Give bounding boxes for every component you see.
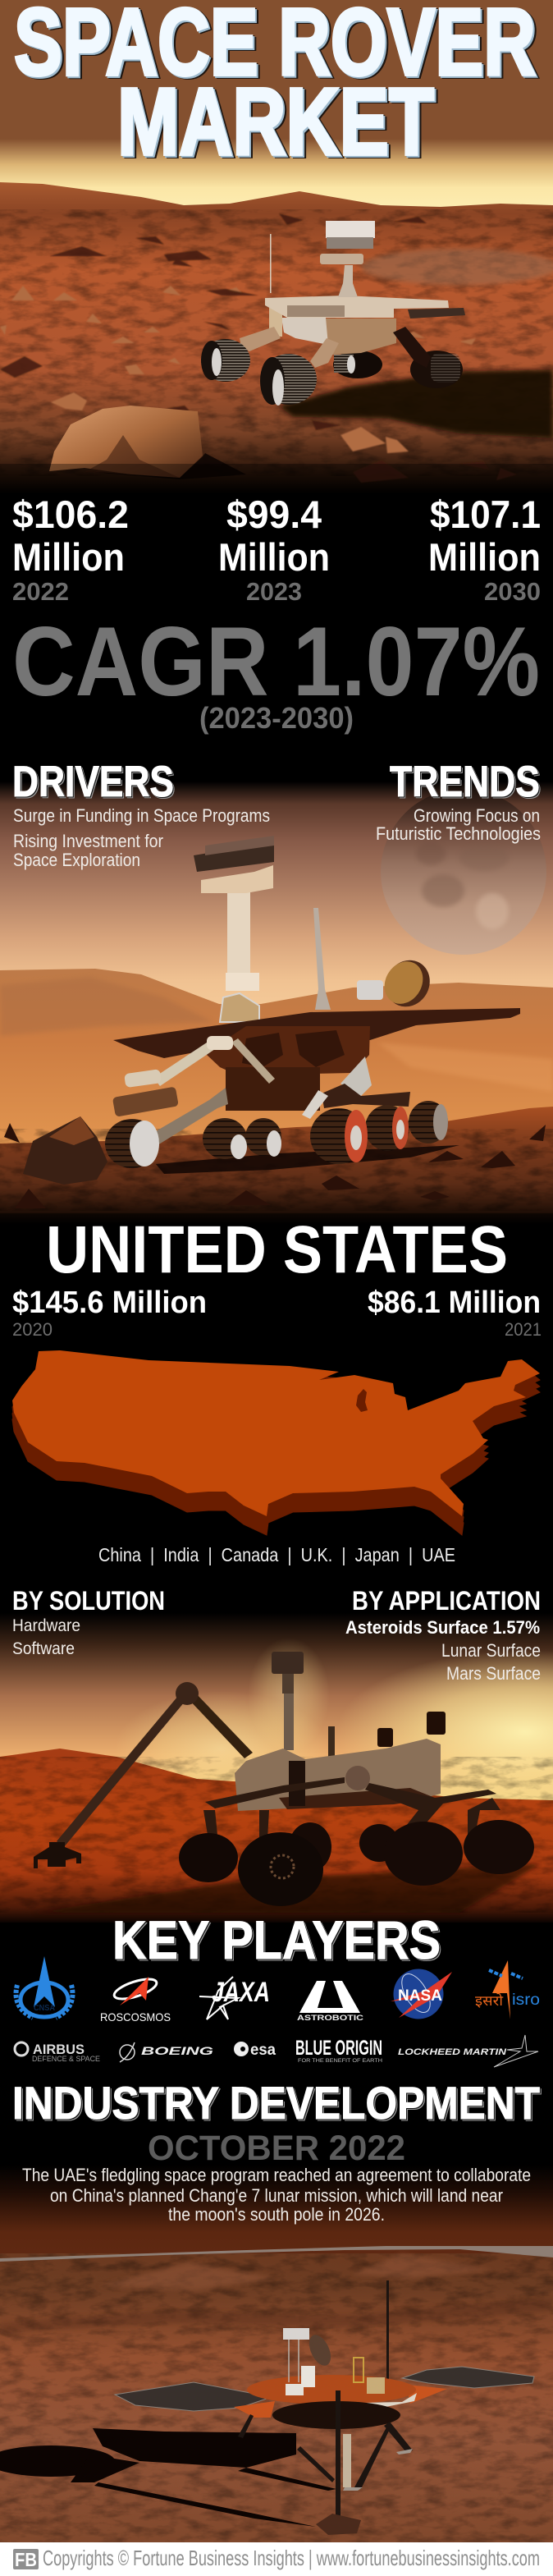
value 2021: $86.1 Million	[368, 1286, 541, 1320]
camera bar	[194, 836, 274, 872]
footer background	[0, 2542, 553, 2576]
deck rim	[322, 2393, 417, 2407]
suspension right	[393, 327, 431, 368]
bright sand patch	[361, 249, 553, 285]
solar panel left	[115, 2382, 272, 2411]
wheels	[105, 1101, 448, 1168]
map extrusion	[12, 1357, 540, 1535]
ground rocks	[4, 1123, 546, 1208]
white box instruments	[301, 2358, 385, 2394]
hill ridge shading	[0, 977, 213, 1036]
logo: Boeing: BOEING	[141, 2044, 213, 2057]
deck front dark bar	[408, 308, 465, 319]
rover left side panel	[281, 318, 328, 345]
front wheel left	[201, 339, 250, 382]
figure 2022: Million	[12, 535, 125, 579]
antenna	[313, 908, 331, 1010]
panel: lander scene	[0, 2246, 553, 2542]
underbody	[272, 2401, 400, 2429]
CAGR period: (2023-2030)	[199, 701, 354, 735]
logo: Astrobotic	[297, 1981, 364, 2022]
logo: Astrobotic: ASTROBOTIC	[297, 2014, 364, 2022]
solar panel right	[402, 2367, 534, 2388]
antenna	[270, 234, 272, 293]
lower body	[226, 1067, 320, 1111]
hill and ground	[0, 1749, 553, 1925]
Fortune Business Insights logo: FB	[15, 2549, 37, 2570]
panel: industry development	[12, 2077, 540, 2225]
rover: curiosity-style vehicle on plain	[201, 221, 465, 406]
hero ground	[0, 182, 553, 494]
logo: CNSA	[16, 1956, 72, 2018]
dish	[377, 952, 438, 1015]
value 2021	[368, 1286, 542, 1340]
rover shadow	[156, 1145, 459, 1174]
logo: ISRO	[475, 1960, 540, 2019]
boulder highlight	[49, 1116, 94, 1145]
arm instrument	[112, 1087, 179, 1117]
arm	[153, 1041, 215, 1086]
logo: Blue Origin: BLUE ORIGIN	[295, 2037, 382, 2060]
logo: Blue Origin: FOR THE BENEFIT OF EARTH	[298, 2059, 382, 2064]
development paragraph: the moon's south pole in 2026.	[168, 2204, 385, 2225]
arm joint	[124, 1069, 162, 1088]
title	[14, 0, 536, 175]
US map	[12, 1350, 540, 1535]
rover deck	[265, 296, 449, 318]
rear right rib band	[431, 353, 460, 383]
rear wheel near body	[333, 351, 382, 378]
mars surface: Mars Surface	[446, 1663, 541, 1684]
mast pole	[227, 889, 250, 973]
solar deck	[113, 1008, 520, 1058]
asteroids surface: Asteroids Surface 1.57%	[345, 1617, 540, 1638]
terrain	[0, 2253, 553, 2542]
mast head	[201, 865, 273, 893]
rover arms	[240, 327, 339, 368]
suspension right rail	[322, 1084, 410, 1108]
driver item 1: Surge in Funding in Space Programs	[13, 805, 270, 826]
wheels	[179, 1820, 534, 1906]
arm	[336, 2390, 340, 2522]
logo: ISRO: isro	[512, 1992, 540, 2009]
logo: Lockheed Martin	[398, 2035, 538, 2067]
logo: NASA: NASA	[398, 1987, 442, 2005]
value 2020	[12, 1286, 207, 1340]
driver item 2: Space Exploration	[13, 850, 140, 870]
mast base hoop	[220, 993, 259, 1022]
wheel shadows	[33, 1863, 542, 1913]
ground bottom fade	[0, 1213, 553, 1225]
arm second segment	[187, 1691, 253, 1758]
body	[235, 1739, 441, 1811]
figure 2023: $99.4	[226, 493, 322, 536]
logo: Lockheed Martin: LOCKHEED MARTIN	[398, 2047, 507, 2057]
map surface	[12, 1350, 540, 1516]
figure 2030: 2030	[484, 577, 541, 606]
sky	[0, 772, 553, 1018]
logo: Airbus: DEFENCE & SPACE	[32, 2055, 100, 2063]
mast head	[272, 1652, 304, 1674]
logo: JAXA	[199, 1977, 270, 2019]
mast	[338, 265, 358, 297]
panel: by application	[345, 1586, 541, 1684]
upper body	[205, 1026, 370, 1075]
panel: key players backdrop	[0, 1923, 553, 2165]
figure 2023: 2023	[246, 577, 302, 606]
figure 2022	[12, 493, 129, 606]
development paragraph	[22, 2165, 531, 2225]
logo: Airbus	[15, 2042, 100, 2063]
horizon ice streak	[0, 2246, 553, 2262]
dish gimbal	[357, 980, 383, 1000]
lunar surface: Lunar Surface	[441, 1640, 541, 1661]
leg left	[146, 1088, 228, 1145]
lander	[115, 2280, 534, 2535]
foil skirt	[234, 2385, 447, 2418]
mast collar	[226, 973, 259, 991]
panel: segmentation scene	[0, 1613, 553, 1925]
panel: drivers text	[12, 758, 270, 870]
panel: key players	[15, 1909, 540, 2067]
ground	[0, 1107, 553, 1225]
value 2020: $145.6 Million	[12, 1286, 207, 1320]
rear right wheel	[410, 351, 463, 388]
logo: Boeing	[120, 2042, 213, 2062]
distant mounds	[98, 2253, 492, 2290]
Great Lakes	[356, 1389, 368, 1412]
development date: OCTOBER 2022	[148, 2129, 405, 2168]
front wheel right	[260, 354, 317, 406]
solution hardware: Hardware	[12, 1616, 80, 1635]
cylinders	[328, 1712, 446, 1759]
arm joint	[176, 1682, 199, 1705]
hub	[345, 1766, 370, 1790]
logo: Roscosmos: ROSCOSMOS	[100, 2010, 171, 2024]
side camera	[320, 254, 363, 264]
title line 2: MARKET	[117, 68, 434, 175]
country list: China | India | Canada | U.K. | Japan | UAE	[98, 1544, 455, 1565]
ground texture	[0, 1129, 553, 1211]
foreground rock shadow side	[85, 435, 180, 478]
lander shadow	[0, 2428, 336, 2527]
camera head	[326, 221, 375, 238]
dark ridges	[0, 2299, 553, 2333]
big dark boulder	[23, 1116, 107, 1185]
legs	[238, 2414, 413, 2489]
body mottling	[242, 1030, 345, 1067]
mast neck	[282, 1674, 294, 1694]
mast	[284, 1691, 294, 1750]
solution software: Software	[12, 1639, 75, 1658]
figure 2023	[218, 493, 330, 606]
logo: Roscosmos	[100, 1975, 171, 2024]
drivers heading: DRIVERS	[12, 758, 174, 806]
figure 2030: $107.1	[430, 493, 541, 536]
ground texture	[0, 1757, 553, 1913]
logo: Airbus: AIRBUS	[33, 2042, 85, 2057]
driver item 2	[13, 831, 163, 870]
figure 2030: Million	[428, 535, 541, 579]
large foreground rock	[49, 406, 203, 478]
camera neck	[327, 237, 373, 249]
dish	[305, 2331, 335, 2369]
sun glow	[115, 1691, 328, 1806]
gripper	[34, 1842, 81, 1868]
suspension	[203, 1777, 500, 1859]
front panel dark	[289, 1761, 305, 1806]
hero rocks	[0, 213, 517, 483]
figure 2022: 2022	[12, 577, 69, 606]
logo: JAXA: JAXA	[212, 1977, 270, 2008]
foreground rock ground shadow	[85, 453, 246, 479]
figure 2030	[428, 493, 541, 606]
suspension triangle right	[340, 1057, 372, 1096]
panel: United States	[12, 1212, 542, 1565]
logo: ESA	[234, 2042, 276, 2059]
mast glow	[248, 1638, 330, 1753]
key players heading: KEY PLAYERS	[112, 1909, 441, 1970]
hero ground texture	[0, 209, 553, 476]
logo: ISRO: इसरो	[475, 1992, 504, 2009]
panel: footer	[0, 2542, 553, 2576]
left upright	[269, 305, 282, 337]
panel: development backdrop	[0, 2165, 553, 2255]
driver item 2: Rising Investment for	[13, 831, 163, 851]
terrain texture	[0, 2253, 553, 2542]
ladder	[343, 2434, 351, 2487]
rover shadow	[279, 369, 553, 438]
deck shaded band	[287, 305, 345, 317]
panel: hero scene	[0, 0, 553, 494]
value 2020: 2020	[12, 1319, 53, 1340]
deck	[247, 2375, 416, 2404]
logo: Blue Origin	[295, 2037, 382, 2064]
figure 2023: Million	[218, 535, 330, 579]
hero bottom fade	[0, 464, 553, 494]
rover bowl	[320, 319, 396, 355]
mast antenna	[386, 2280, 389, 2387]
rover: dark silhouette with arm	[34, 1652, 534, 1906]
panel: trends text	[376, 758, 541, 844]
hero sky	[0, 0, 553, 213]
hill ridge shading right	[377, 1043, 553, 1092]
silver strut	[302, 1090, 328, 1119]
arm forearm	[231, 1038, 275, 1084]
distant hills	[0, 969, 553, 1149]
panel: drivers and trends scene	[0, 772, 553, 1225]
camera mast	[283, 2328, 309, 2395]
arm shoulder	[207, 1036, 233, 1050]
digging mound	[316, 2514, 361, 2535]
foot pads	[343, 2449, 413, 2491]
trend item	[376, 805, 541, 844]
rover: spirit-style with mast	[105, 836, 520, 1174]
panel: by solution	[12, 1586, 165, 1658]
figure 2022: $106.2	[12, 493, 129, 536]
right sky brightening	[336, 1650, 553, 1814]
body lower rail	[279, 1788, 435, 1809]
logo: ESA: esa	[250, 2042, 276, 2059]
logo: NASA	[391, 1969, 452, 2019]
solution heading: BY SOLUTION	[12, 1586, 165, 1616]
panel: market size figures	[12, 493, 541, 735]
value 2021: 2021	[505, 1319, 542, 1340]
sky	[0, 1613, 553, 1810]
moon	[381, 789, 546, 955]
logo: CNSA: CNSA	[34, 2004, 55, 2013]
arm	[57, 1691, 189, 1847]
